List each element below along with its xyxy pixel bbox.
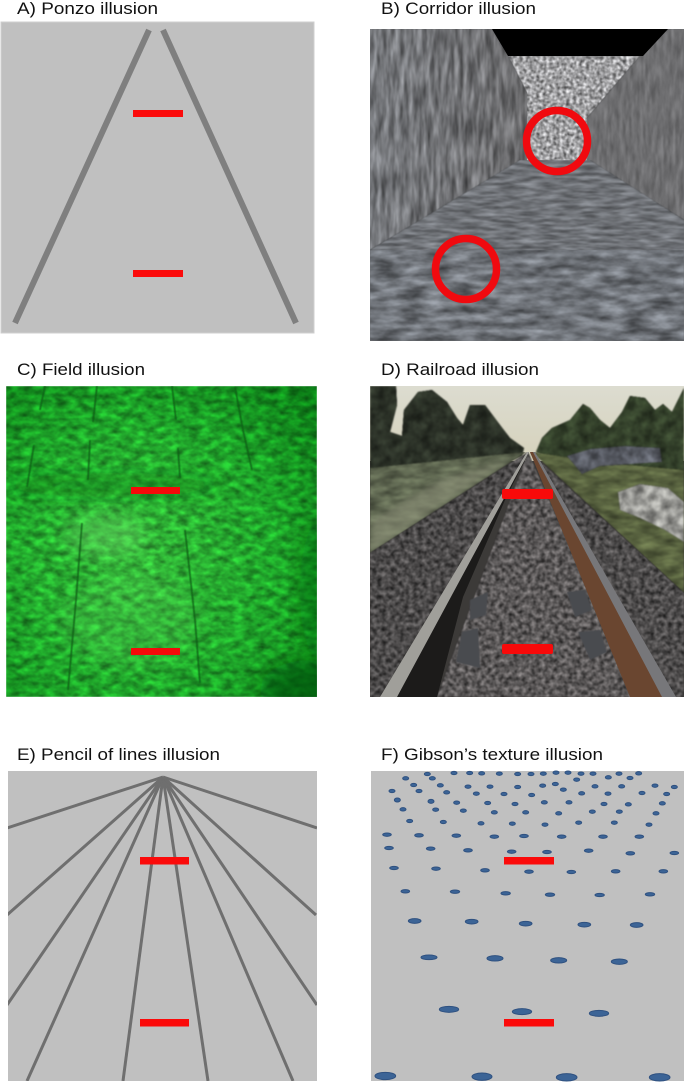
- red circles: [436, 110, 588, 300]
- corridor scene: [370, 29, 684, 341]
- sleepers and stones: [456, 590, 607, 668]
- red bars C: [131, 487, 180, 655]
- grey background A: [1, 22, 314, 333]
- left rail: [397, 452, 529, 697]
- railroad scene: [370, 386, 684, 697]
- heading C: C) Field illusion: [17, 360, 145, 379]
- texture dots: [375, 771, 679, 1081]
- red bars D: [502, 489, 553, 654]
- radiating lines: [7, 777, 317, 1081]
- red bars E: [140, 857, 189, 1026]
- grass verges: [370, 452, 526, 553]
- red bars F: [504, 857, 554, 1026]
- panel B: Corridor illusion: [370, 0, 684, 341]
- black ceiling: [492, 29, 668, 56]
- heading E: E) Pencil of lines illusion: [17, 745, 220, 764]
- panel D: Railroad illusion: [370, 360, 684, 697]
- panel C: Field illusion: [6, 363, 317, 697]
- converging lines: [15, 30, 296, 323]
- heading D: D) Railroad illusion: [381, 360, 539, 379]
- panel A: Ponzo illusion: [1, 0, 314, 333]
- red bars A: [133, 110, 183, 277]
- panel E: Pencil of lines illusion: [7, 745, 317, 1081]
- trees: [370, 386, 525, 468]
- heading F: F) Gibson’s texture illusion: [381, 745, 603, 764]
- panel F: Gibson's texture illusion: [371, 745, 684, 1081]
- ballast: [370, 452, 528, 697]
- rock piles: [618, 484, 684, 542]
- right rail: [530, 452, 664, 697]
- grass scene: [6, 386, 317, 697]
- grey background E: [8, 771, 317, 1081]
- furrow lines: [27, 386, 252, 690]
- grey background F: [371, 771, 684, 1081]
